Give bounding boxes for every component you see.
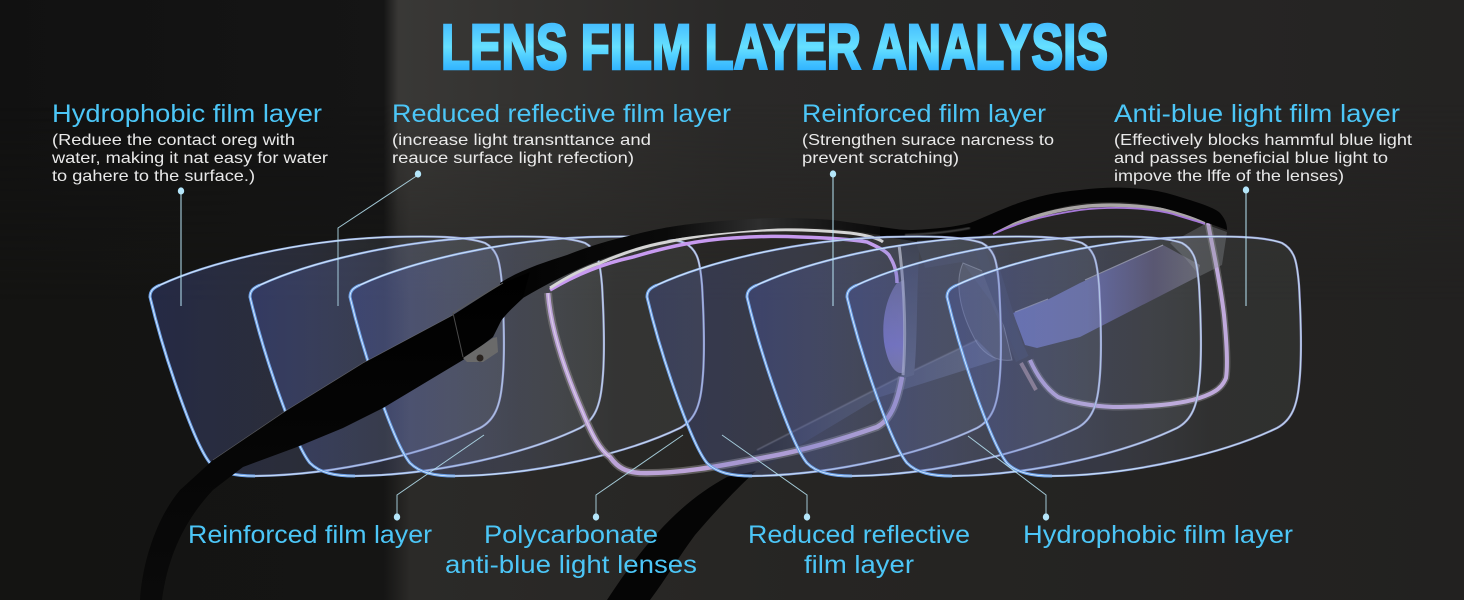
callout: hydrophobic film layer (top): water, making it nat easy for water <box>51 150 329 167</box>
callout: hydrophobic film layer (top): Hydrophobic film layer <box>52 100 322 128</box>
callout: reinforced film layer (top): prevent scratching) <box>802 150 959 167</box>
bridge strut dark <box>976 238 1024 358</box>
label: polycarbonate anti-blue light lenses: anti-blue light lenses <box>445 551 697 579</box>
black top bar right and bridge <box>880 188 1227 241</box>
callout: reinforced film layer (top) <box>802 100 1054 167</box>
callout: anti-blue light film layer: Anti-blue light film layer <box>1114 100 1400 128</box>
callout: reduced reflective film layer (top): Reduced reflective film layer <box>392 100 731 128</box>
background <box>0 0 731 600</box>
leader lines bottom <box>394 435 1049 521</box>
right nose pad <box>959 263 1012 360</box>
far temple of the glasses <box>607 245 1200 600</box>
label: polycarbonate anti-blue light lenses <box>445 521 697 579</box>
right rim colored edge <box>1021 363 1036 390</box>
label: hydrophobic film layer (bottom): Hydrophobic film layer <box>1023 521 1293 549</box>
callout: hydrophobic film layer (top) <box>51 100 329 185</box>
callout: anti-blue light film layer: impove the lffe of the lenses) <box>1114 168 1344 185</box>
nose strut <box>900 238 920 378</box>
title: LENS FILM LAYER ANALYSIS <box>441 11 1108 83</box>
glasses frame <box>140 188 1227 600</box>
lens layers behind the frame <box>150 237 704 476</box>
leader lines top <box>178 170 1249 306</box>
callout: anti-blue light film layer: and passes beneficial blue light to <box>1114 150 1388 167</box>
lens layers in front of the frame <box>647 237 1301 476</box>
label: polycarbonate anti-blue light lenses: Polycarbonate <box>484 521 658 549</box>
callout: reduced reflective film layer (top): reauce surface light refection) <box>392 150 634 167</box>
top rim silver line <box>550 230 883 288</box>
label: reduced reflective film layer (bottom): film layer <box>804 551 914 579</box>
callout: reinforced film layer (top): Reinforced film layer <box>802 100 1046 128</box>
nose pad <box>883 280 904 373</box>
callout: reduced reflective film layer (top) <box>392 100 731 167</box>
hinge right <box>1170 224 1227 276</box>
callout: hydrophobic film layer (top): (Reduee the contact oreg with <box>52 132 295 149</box>
callout: reinforced film layer (top): (Strengthen surace narcness to <box>802 132 1054 149</box>
callout: reduced reflective film layer (top): (increase light transnttance and <box>392 132 651 149</box>
callout: hydrophobic film layer (top): to gahere to the surface.) <box>52 168 255 185</box>
label: reduced reflective film layer (bottom): Reduced reflective <box>748 521 970 549</box>
right rim <box>1030 223 1227 407</box>
top rim purple line <box>550 236 897 290</box>
black top bar left <box>500 218 917 322</box>
hinge <box>463 337 498 362</box>
label: reduced reflective film layer (bottom) <box>748 521 970 579</box>
near temple <box>140 272 530 600</box>
left rim: lower purple band <box>548 293 902 473</box>
bridge translucent area <box>915 237 1027 362</box>
callout: anti-blue light film layer: (Effectively blocks hammful blue light <box>1114 132 1413 149</box>
label: reinforced film layer (bottom): Reinforced film layer <box>188 521 432 549</box>
callout: anti-blue light film layer <box>1114 100 1413 185</box>
